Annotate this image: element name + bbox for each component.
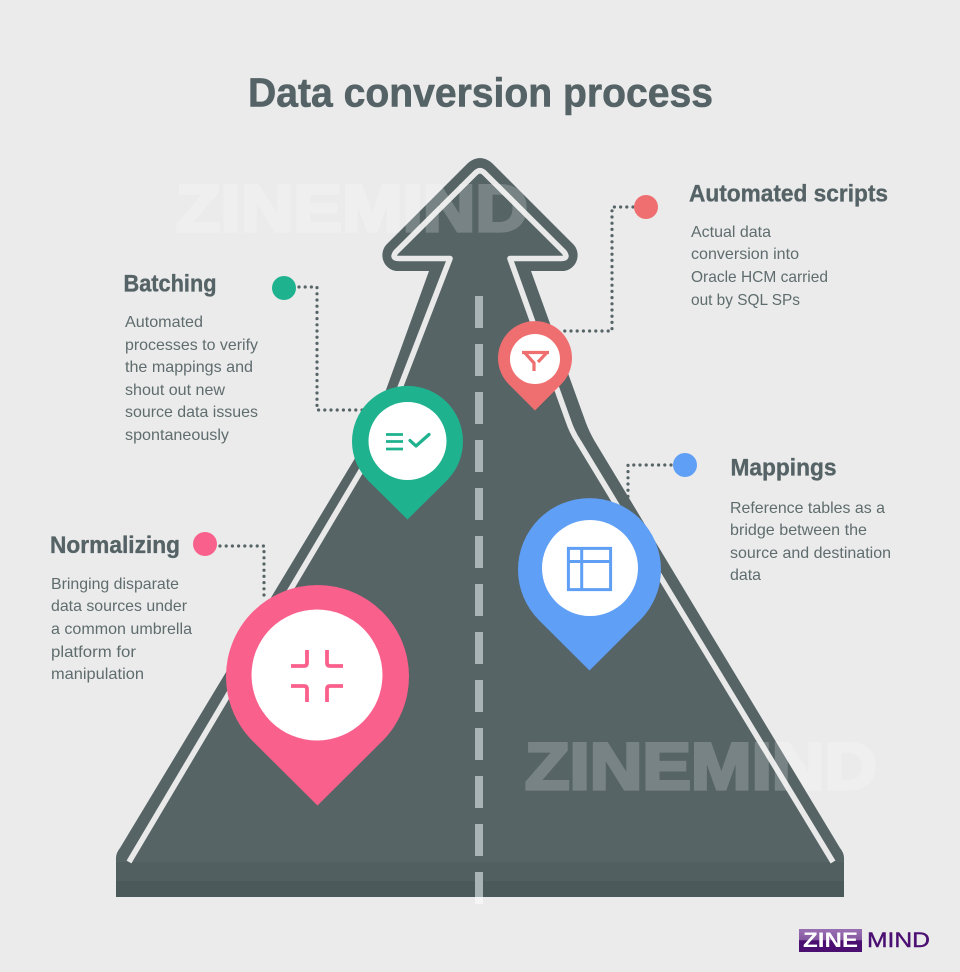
connector: normalizing	[220, 546, 264, 600]
description: Automated	[125, 314, 203, 331]
description	[51, 576, 192, 683]
road base band	[116, 862, 844, 897]
heading: Automated scripts	[689, 180, 888, 208]
description	[730, 500, 891, 584]
description: source data issues	[125, 404, 258, 421]
description: the mappings and	[125, 359, 253, 376]
description	[691, 224, 828, 309]
road arrow	[116, 158, 844, 904]
logo: ZineMind	[799, 929, 930, 952]
text block: automated scripts	[689, 180, 888, 309]
icon: funnel	[522, 352, 549, 371]
pin: batching	[352, 386, 463, 520]
description: Reference tables as a	[730, 500, 885, 517]
description: manipulation	[51, 666, 144, 683]
description: out by SQL SPs	[691, 292, 800, 309]
heading: Mappings	[730, 454, 836, 482]
logo: ZineMind: MIND	[867, 929, 930, 952]
description: spontaneously	[125, 427, 229, 444]
pin: normalizing	[226, 585, 409, 806]
marker dot: normalizing	[193, 532, 217, 556]
marker dot: batching	[272, 276, 296, 300]
description: data	[730, 567, 761, 584]
road surface	[116, 158, 844, 897]
description: data sources under	[51, 598, 188, 615]
marker dot: mappings	[673, 453, 697, 477]
road edge line	[129, 171, 833, 862]
watermark: bottom: ZINEMIND	[525, 729, 877, 803]
description: Bringing disparate	[51, 576, 179, 593]
connector: batching	[299, 287, 362, 410]
title: Data conversion process	[248, 70, 713, 116]
icon: compress arrows	[291, 650, 343, 702]
description: a common umbrella	[51, 621, 192, 638]
description: source and destination	[730, 545, 891, 562]
watermark: top: ZINEMIND	[176, 171, 528, 245]
text block: batching	[124, 270, 258, 444]
description: platform for	[51, 644, 137, 661]
description: shout out new	[125, 382, 225, 399]
heading: Batching	[124, 270, 216, 298]
description: bridge between the	[730, 522, 867, 539]
text block: mappings	[730, 454, 891, 584]
description: Actual data	[691, 224, 771, 241]
marker dot: automated scripts	[634, 195, 658, 219]
icon: table	[568, 548, 611, 590]
pin: mappings	[518, 498, 661, 670]
description: conversion into	[691, 246, 799, 263]
text block: normalizing	[50, 532, 192, 683]
pin: automated scripts	[498, 321, 572, 410]
connector: mappings	[628, 465, 671, 498]
description: processes to verify	[125, 337, 258, 354]
heading: Normalizing	[50, 532, 180, 559]
connector: automated scripts	[560, 207, 633, 331]
description: Oracle HCM carried	[691, 269, 828, 286]
description	[125, 314, 258, 444]
icon: checklist	[386, 434, 429, 449]
logo: ZineMind: ZINE	[803, 929, 858, 952]
road centre dashes	[475, 296, 483, 904]
